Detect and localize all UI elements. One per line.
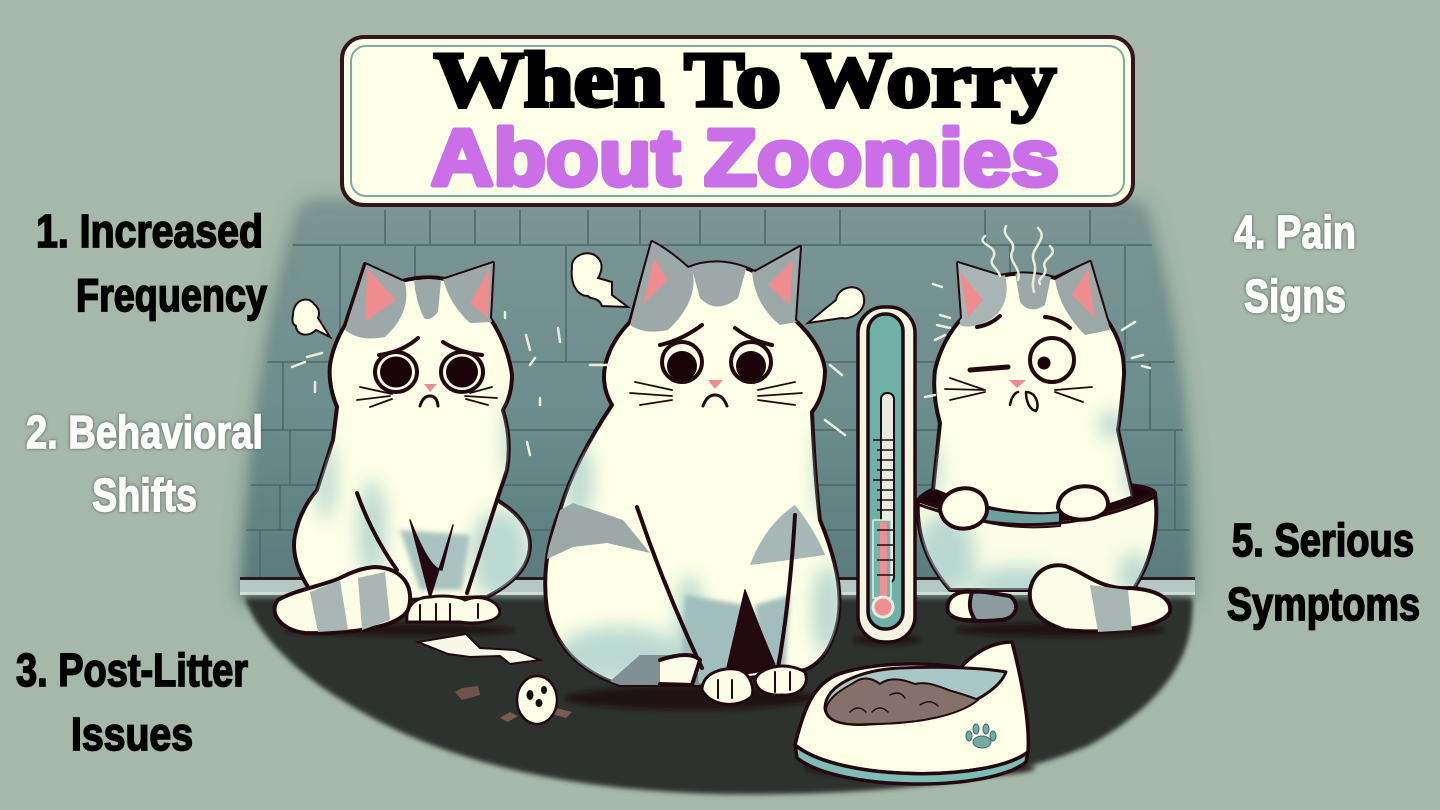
- ear pink: [365, 268, 396, 322]
- label 1: 1. Increased: [36, 205, 263, 257]
- cat 1: [274, 262, 530, 633]
- food: [826, 678, 978, 724]
- body and head: [933, 262, 1133, 514]
- sweat marks: [292, 284, 1150, 455]
- pot stripes: [985, 508, 1060, 527]
- tail: [1030, 565, 1170, 631]
- puffs and motion marks: [292, 253, 1150, 455]
- title plate: [342, 36, 1133, 205]
- bowl shell: [795, 642, 1028, 774]
- brows: [379, 338, 482, 355]
- paw print: [966, 724, 996, 748]
- bowl interior: [825, 667, 1006, 724]
- label 1: Frequency: [76, 269, 267, 321]
- paws: [940, 488, 987, 529]
- body and head: [545, 242, 840, 685]
- cat 3 in pot: [915, 260, 1170, 632]
- label 3: [16, 644, 248, 760]
- puff centre top: [572, 253, 628, 307]
- food bowl: [795, 642, 1028, 784]
- label 4: 4. Pain: [1234, 206, 1356, 258]
- eyes: [970, 367, 1008, 370]
- wall with tiles: [240, 205, 1200, 600]
- puff left: [292, 300, 330, 337]
- label 2: Shifts: [92, 469, 197, 521]
- puff centre right: [808, 287, 864, 323]
- ear pink: [643, 258, 668, 305]
- legs: [357, 493, 497, 593]
- ear pink: [960, 272, 983, 318]
- label 3: Issues: [71, 708, 193, 760]
- label 4: Signs: [1244, 270, 1346, 322]
- toy ball: [455, 676, 572, 724]
- label 3: 3. Post-Litter: [16, 644, 248, 696]
- title line 2: About Zoomies: [431, 113, 1059, 202]
- crumpled paper: [418, 634, 540, 664]
- label 1: [36, 205, 267, 321]
- thermometer: [858, 307, 915, 642]
- floor: [245, 598, 1192, 794]
- pot: [918, 493, 1156, 590]
- eyes: [375, 352, 417, 392]
- back foot: [948, 592, 1016, 621]
- paws: [702, 669, 753, 704]
- body and head: [294, 263, 530, 600]
- eyes: [662, 342, 702, 382]
- label 5: [1227, 514, 1420, 630]
- label 2: [26, 406, 263, 521]
- paws: [407, 596, 500, 623]
- steam: [983, 226, 1053, 292]
- legs: [637, 507, 795, 668]
- floor shadows: [285, 623, 1165, 778]
- label 4: [1234, 206, 1356, 322]
- label 2: 2. Behavioral: [26, 406, 263, 458]
- cat 2: [545, 240, 844, 704]
- title line 1: When To Worry: [434, 36, 1056, 123]
- brows: [660, 325, 772, 345]
- tail: [274, 567, 410, 633]
